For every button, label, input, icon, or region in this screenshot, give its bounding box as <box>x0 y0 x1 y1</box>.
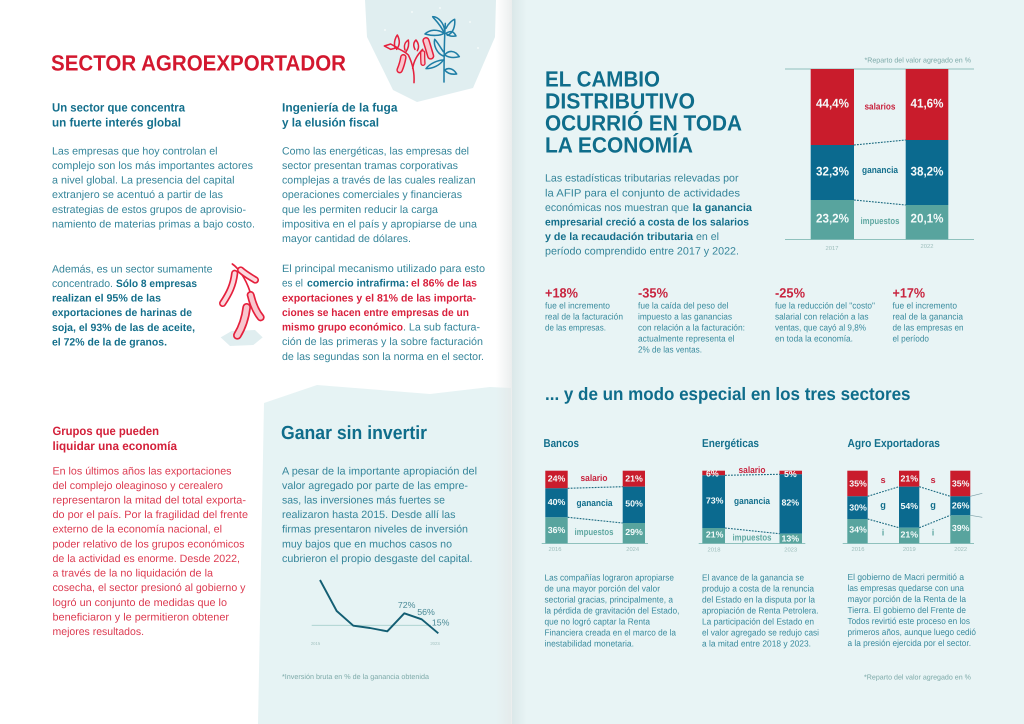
stacked bar chart: whole economy: 2017 <box>826 245 838 252</box>
text block: Ganar sin invertir <box>282 465 477 565</box>
text block: Bancos: inestabilidad monetaria. <box>544 639 634 649</box>
paragraph <box>52 465 248 638</box>
text block: Bancos: la pérdida de gravitación del Estado, <box>544 606 680 616</box>
stat: -35%: -35% <box>638 286 668 301</box>
text block: concentration: el 72% de la de granos. <box>52 336 167 348</box>
chart: Agro Exportadoras: 39% <box>952 523 970 533</box>
bar 2022: 41,6% <box>910 97 944 111</box>
text block: intro right page: en el <box>696 231 719 243</box>
paragraph: externo de la economía nacional, el <box>52 524 222 536</box>
paragraph: complejo son los más importantes actores <box>52 160 253 172</box>
stat: +18%: de las empresas. <box>545 323 606 333</box>
stat: -25% <box>775 286 875 344</box>
stat: +17%: el período <box>892 334 929 344</box>
panel: page fold shadow <box>496 0 512 724</box>
stat: -25%: ventas, que cayó al 9,8% <box>775 323 866 333</box>
heading: liquidar una economía <box>52 439 177 453</box>
paragraph: Las empresas que hoy controlan el <box>52 145 217 157</box>
text block: intro right page: económicas nos muestran que <box>545 202 689 214</box>
heading <box>52 101 185 130</box>
text block: intrafirm trade: es el <box>282 278 303 290</box>
paragraph: operaciones comerciales y financieras <box>282 189 462 201</box>
text block: Ganar sin invertir: firmas presentaron niveles de inversión <box>282 524 468 536</box>
chart: Energéticas: 21% <box>706 530 724 540</box>
chart: Agro Exportadoras: 54% <box>900 501 918 511</box>
text block: Energéticas <box>702 573 819 649</box>
paragraph: de la actividad es enorme. Desde 2022, <box>52 553 240 565</box>
text block: intrafirm trade: ciones se hacen entre empresas de un <box>282 307 469 319</box>
heading: Bancos: Bancos <box>544 438 579 450</box>
paragraph: mejores resultados. <box>52 626 144 638</box>
text block: concentration: Además, es un sector sumamente <box>52 263 213 275</box>
paragraph: poder relativo de los grupos económicos <box>52 538 244 550</box>
chart: Energéticas: impuestos <box>732 533 772 543</box>
title: El cambio distributivo: LA ECONOMÍA <box>545 132 693 157</box>
chart: Agro Exportadoras: g <box>880 500 886 510</box>
stat: -25%: fue la reducción del "costo" <box>775 301 875 311</box>
stat: -25%: -25% <box>775 286 805 301</box>
paragraph: impositiva en el país y apropiarse de una <box>282 218 477 230</box>
text block: intrafirm trade: . La sub factura- <box>403 322 480 334</box>
stat: +18% <box>545 286 623 333</box>
chart: Energéticas: 6% <box>706 469 719 479</box>
heading: three sectors: ... y de un modo especial en los tres sectores <box>545 384 910 404</box>
text block: Energéticas: apropiación de Renta Petrolera. <box>702 606 818 616</box>
pods on the plant <box>400 41 431 70</box>
chart: Energéticas: 5% <box>784 469 797 479</box>
text block: intro right page <box>545 173 752 258</box>
stat: +18%: fue el incremento <box>545 301 610 311</box>
text block: Energéticas: produjo a costa de la renuncia <box>702 584 814 594</box>
text block: intro right page: la ganancia <box>692 202 752 214</box>
text block: intro right page: período comprendido entre 2017 y 2022. <box>545 246 739 258</box>
paragraph: sector presentan tramas corporativas <box>282 160 458 172</box>
title: El cambio distributivo <box>545 67 742 157</box>
chart: Agro Exportadoras: 2016 <box>852 546 864 553</box>
heading: Grupos que pueden <box>52 424 159 438</box>
chart: Agro Exportadoras: 21% <box>900 474 918 484</box>
stat: -25%: en toda la economía. <box>775 334 853 344</box>
stat: +17%: de las empresas en <box>892 323 964 333</box>
text block: Ganar sin invertir: muy bajos que en muchos casos no <box>282 538 452 550</box>
stat: -35%: 2% de las ventas. <box>638 345 702 355</box>
text block: concentration <box>52 263 213 348</box>
paragraph: do por el país. Por la fragilidad del frente <box>52 509 248 521</box>
paragraph: extranjero se acentuó a partir de las <box>52 189 223 201</box>
text block: intro right page: empresarial creció a costa de los salarios <box>545 216 749 228</box>
chart: Agro Exportadoras <box>843 471 982 553</box>
text block: intro right page: y de la recaudación tributaria <box>545 231 693 243</box>
paragraph: mayor cantidad de dólares. <box>282 233 411 245</box>
chart: Bancos: 40% <box>548 497 565 507</box>
bar 2017: 23,2% <box>816 212 849 226</box>
chart: Bancos: salario <box>580 473 608 483</box>
chart: Bancos: 21% <box>625 474 643 484</box>
icon: soy and corn plants <box>384 17 459 83</box>
panel: top illustration backdrop <box>365 0 496 102</box>
stat: -35%: fue la caída del peso del <box>638 301 729 311</box>
chart: Agro Exportadoras: i <box>932 528 934 538</box>
stacked bar chart: whole economy: 2022 <box>921 243 933 250</box>
bar 2022 <box>906 69 948 239</box>
footnote: value added: *Reparto del valor agregado en % <box>864 672 972 681</box>
bar 2017 <box>811 69 854 239</box>
stat: -25%: salarial con relación a las <box>775 312 869 322</box>
stat: -35%: actualmente representa el <box>638 334 735 344</box>
stat: -35%: con relación a la facturación: <box>638 323 745 333</box>
heading: y la elusión fiscal <box>282 116 379 130</box>
paragraph: que les permiten reducir la carga <box>282 204 438 216</box>
chart: Agro Exportadoras: 30% <box>849 502 867 512</box>
chart: Agro Exportadoras: s <box>880 475 886 485</box>
text block: intrafirm trade: de las segundas son la norma en el sector. <box>282 351 484 363</box>
bar 2022: 20,1% <box>910 212 944 226</box>
text block: Energéticas: La participación del Estado en <box>702 617 814 627</box>
chart: Agro Exportadoras: i <box>882 528 884 538</box>
heading <box>52 424 177 453</box>
stat: +17%: +17% <box>892 286 925 301</box>
chart: Bancos: 50% <box>625 499 643 509</box>
chart: Bancos: 29% <box>625 527 643 537</box>
text block: Bancos: Las compañías lograron apropiarse <box>544 573 674 583</box>
paragraph: En los últimos años las exportaciones <box>52 465 232 477</box>
stat: -35% <box>638 286 745 355</box>
paragraph: a través de la no liquidación de la <box>52 568 213 580</box>
title: El cambio distributivo: EL CAMBIO <box>545 67 660 92</box>
stat: +17%: fue el incremento <box>892 301 957 311</box>
stat: +17% <box>892 286 964 344</box>
paragraph <box>282 145 477 245</box>
stat: -35%: impuesto a las ganancias <box>638 312 733 322</box>
text block: Agro Exportadoras: Tierra. El gobierno del Frente de <box>848 605 966 615</box>
chart: Energéticas: salario <box>738 465 766 475</box>
text block: Agro Exportadoras: a la presión ejercida por el sector. <box>848 638 971 648</box>
chart: Bancos: 36% <box>548 525 565 535</box>
stacked bar chart: whole economy: impuestos <box>860 216 900 226</box>
heading: Ingeniería de la fuga <box>282 101 398 115</box>
text block: Energéticas: del Estado en la disputa por la <box>702 595 815 605</box>
text block: global interest <box>52 101 255 230</box>
paragraph: namiento de materias primas a bajo costo. <box>52 218 255 230</box>
paragraph: beneficiaron y le permitieron obtener <box>52 611 229 623</box>
text block: intrafirm trade <box>282 263 485 363</box>
chart: Bancos: 2024 <box>626 546 640 553</box>
text block: intrafirm trade: el 86% de las <box>411 278 477 290</box>
heading: Un sector que concentra <box>52 101 185 115</box>
panel: Ganar sin invertir backdrop <box>258 385 511 724</box>
text block: Agro Exportadoras: las empresas quedarse con una <box>848 583 964 593</box>
heading <box>282 101 398 130</box>
paragraph: a nivel global. La presencia del capital <box>52 175 234 187</box>
text block: Bancos: Financiera creada en el marco de la <box>544 628 676 638</box>
chart: Agro Exportadoras: 2019 <box>903 546 916 553</box>
bar 2017: 44,4% <box>816 97 849 111</box>
chart: Energéticas: 82% <box>781 498 799 508</box>
chart: Agro Exportadoras: 2022 <box>954 546 967 553</box>
text block: concentration: realizan el 95% de las <box>52 292 161 304</box>
text block: Ganar sin invertir: cubrieron el propio desgaste del capital. <box>282 553 472 565</box>
stat: +18%: real de la facturación <box>545 312 623 322</box>
text block: concentration: soja, el 93% de las de aceite, <box>52 322 195 334</box>
text block: intrafirm trade: El principal mecanismo utilizado para esto <box>282 263 485 275</box>
footnote: investment: *Inversión bruta en % de la ganancia obtenida <box>282 672 429 681</box>
line chart: investment: 72% <box>398 600 416 610</box>
chart: Bancos: impuestos <box>574 527 614 537</box>
chart: Bancos: 24% <box>548 474 565 484</box>
text block: Bancos: sectorial gracias, principalmente, a <box>544 595 673 605</box>
heading: un fuerte interés global <box>52 116 181 130</box>
paragraph: complejas a través de las cuales realizan <box>282 175 476 187</box>
paragraph: estrategias de estos grupos de aprovisio- <box>52 204 246 216</box>
chart: Agro Exportadoras: 21% <box>900 529 918 539</box>
chart: Energéticas: ganancia <box>734 496 771 506</box>
chart: Agro Exportadoras: s <box>930 475 936 485</box>
stacked bar chart: whole economy <box>785 69 974 252</box>
text block: concentration: exportaciones de harinas de <box>52 307 192 319</box>
line chart: investment: 15% <box>432 618 450 628</box>
chart: Energéticas <box>699 465 805 554</box>
text block: Agro Exportadoras: primeros años, aunque luego cedió <box>848 627 976 637</box>
line chart: investment <box>311 580 450 646</box>
text block: intrafirm trade: : <box>406 278 409 290</box>
stat: +17%: real de la ganancia <box>892 312 963 322</box>
text block: intrafirm trade: ción de las primeras y la sobre facturación <box>282 336 483 348</box>
text block: Energéticas: a la mitad entre 2018 y 2023. <box>702 639 811 649</box>
heading: Energéticas: Energéticas <box>702 438 759 450</box>
chart: Bancos: 2016 <box>549 546 561 553</box>
line chart: investment: 2015 <box>311 641 321 646</box>
paragraph: del complejo oleaginoso y cerealero <box>52 480 223 492</box>
paragraph: cosecha, el sector presionó al gobierno y <box>52 582 246 594</box>
line chart: investment: 2023 <box>430 641 440 646</box>
text block: intrafirm trade: mismo grupo económico <box>282 322 404 334</box>
text block: Ganar sin invertir: valor agregado por parte de las empre- <box>282 480 468 492</box>
text block: Ganar sin invertir: sas, las inversiones más fuertes se <box>282 494 445 506</box>
text block: Ganar sin invertir: realizaron hasta 2015. Desde allí las <box>282 509 456 521</box>
stat: +18%: +18% <box>545 286 578 301</box>
text block: intro right page: Las estadísticas tributarias relevadas por <box>545 173 739 185</box>
text block: Agro Exportadoras: Todos revirtió este proceso en los <box>848 616 971 626</box>
stacked bar chart: whole economy: ganancia <box>862 165 899 175</box>
text block: Ganar sin invertir: A pesar de la importante apropiación del <box>282 465 477 477</box>
chart: Agro Exportadoras: 35% <box>952 479 970 489</box>
bar 2017: 32,3% <box>816 165 849 179</box>
chart: Agro Exportadoras: 35% <box>849 479 867 489</box>
text block: Energéticas: el valor agregado se redujo casi <box>702 628 819 638</box>
chart: Agro Exportadoras: 26% <box>952 500 970 510</box>
text block: Bancos <box>544 573 680 649</box>
chart: Energéticas: 13% <box>781 533 799 543</box>
text block: intro right page: la AFIP para el conjunto de actividades <box>545 187 740 199</box>
chart: Agro Exportadoras: 34% <box>849 525 867 535</box>
chart note: *Reparto del valor agregado en % <box>864 56 972 65</box>
paragraph: logró un conjunto de medidas que lo <box>52 597 227 609</box>
line chart: investment: 56% <box>417 607 435 617</box>
icon: soy pods <box>221 264 263 346</box>
panel: right page background <box>512 0 1024 724</box>
heading: Ganar sin invertir: Ganar sin invertir <box>281 423 428 444</box>
chart: Energéticas: 73% <box>706 495 724 505</box>
text block: Agro Exportadoras <box>848 572 976 648</box>
text block: fiscal engineering <box>282 101 477 245</box>
text block: Bancos: de una mayor porción del valor <box>544 584 660 594</box>
chart: Energéticas: 2023 <box>784 546 797 554</box>
panel: left page background <box>0 0 512 724</box>
paragraph <box>52 145 255 230</box>
chart: Energéticas: 2018 <box>708 546 720 554</box>
text block: intrafirm trade: comercio intrafirma <box>307 278 405 290</box>
paragraph: representaron la mitad del total exporta- <box>52 494 246 506</box>
chart: Agro Exportadoras: g <box>930 500 936 510</box>
text block: concentration: Sólo 8 empresas <box>116 278 197 290</box>
bar 2022: 38,2% <box>910 165 944 179</box>
stacked bar chart: whole economy: salarios <box>864 101 896 111</box>
text block: Bancos: que no logró captar la Renta <box>544 617 650 627</box>
text block: groups that can liquidate an economy <box>52 424 248 638</box>
chart: Bancos: ganancia <box>576 498 613 508</box>
text block: Energéticas: El avance de la ganancia se <box>702 573 804 583</box>
title: El cambio distributivo: OCURRIÓ EN TODA <box>545 110 742 135</box>
title: Sector agroexportador: SECTOR AGROEXPORTADOR <box>51 51 346 76</box>
text block: intrafirm trade: exportaciones y el 81% de las importa- <box>282 292 476 304</box>
chart: Bancos <box>542 471 648 553</box>
heading: Agro Exportadoras: Agro Exportadoras <box>848 438 940 450</box>
paragraph: Como las energéticas, las empresas del <box>282 145 469 157</box>
text block: Agro Exportadoras: mayor porción de la Renta de la <box>848 594 966 604</box>
title: El cambio distributivo: DISTRIBUTIVO <box>545 88 695 114</box>
text block: Agro Exportadoras: El gobierno de Macri permitió a <box>848 572 964 582</box>
text block: concentration: concentrado. <box>52 278 113 290</box>
